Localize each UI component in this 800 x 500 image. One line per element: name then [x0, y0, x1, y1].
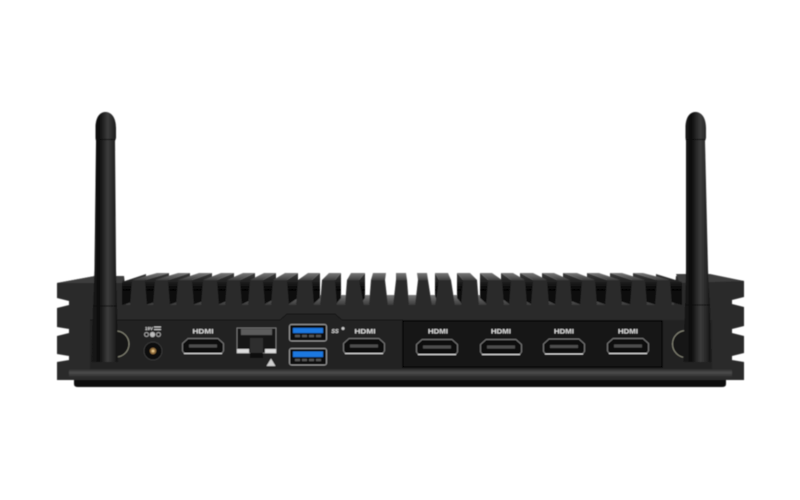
right antenna: [683, 112, 711, 362]
HDMI labels: HDMI: [192, 330, 214, 336]
power label: 19V: [145, 326, 153, 331]
HDMI labels: HDMI: [354, 330, 376, 336]
HDMI port 3: [416, 340, 458, 354]
USB SuperSpeed icon: [342, 327, 344, 330]
ethernet port: [237, 328, 276, 358]
left round connector: [103, 331, 129, 357]
chassis body with side notches: [57, 276, 744, 380]
HDMI port 2: [344, 338, 384, 354]
HDMI labels: HDMI: [618, 330, 638, 336]
lower front band: [69, 369, 732, 377]
ledge between fins: [126, 295, 674, 305]
right heatsink fins: [393, 273, 682, 306]
HDMI port 6: [608, 338, 648, 354]
HDMI panel: [403, 321, 662, 367]
HDMI labels: HDMI: [428, 330, 448, 336]
left heatsink fins: [122, 273, 388, 306]
port recess: [90, 314, 712, 369]
HDMI labels: HDMI: [554, 330, 574, 336]
HDMI port 1: [182, 338, 224, 354]
right corner top face: [676, 274, 744, 283]
USB port bottom: [290, 348, 326, 365]
HDMI port 4: [480, 340, 522, 354]
power jack: [144, 342, 162, 360]
HDMI labels: [192, 330, 638, 336]
left antenna: [91, 112, 118, 362]
recess top shadow line: [90, 314, 403, 320]
right round connector: [672, 330, 700, 358]
USB port top: [290, 324, 326, 341]
left corner top face: [57, 276, 124, 283]
HDMI labels: HDMI: [491, 330, 511, 336]
HDMI port 5: [544, 339, 584, 354]
power label: [144, 326, 161, 337]
base foot: [74, 376, 726, 387]
USB SuperSpeed label: SS: [331, 329, 339, 335]
warning triangle: [266, 358, 276, 366]
